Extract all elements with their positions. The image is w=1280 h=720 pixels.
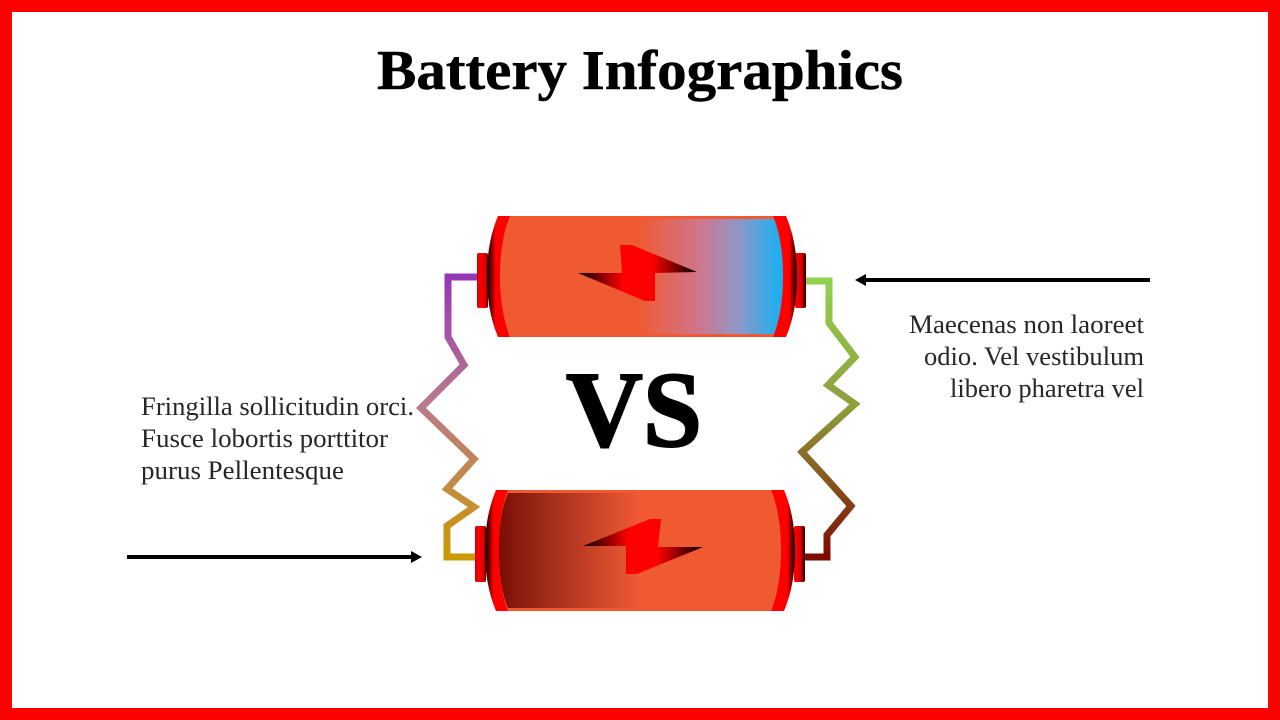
cap: top left [487,216,512,337]
text: left callout [141,392,414,485]
text: left callout: Fusce lobortis porttitor [141,424,388,453]
terminal: bottom right [794,526,805,582]
battery: bottom, draining [475,490,805,611]
text: right callout [909,310,1145,403]
terminal: bottom left [475,526,486,582]
cap: bottom right [770,490,795,611]
wire: left purple to gold [421,277,477,557]
title: Battery Infographics [377,40,903,102]
wire: right green to dark red [802,281,855,557]
terminal: top left [477,253,488,308]
text: right callout: Maecenas non laoreet [909,310,1145,339]
battery: top, charging [477,216,806,337]
terminal: top right [795,253,806,308]
lightning bolt: bottom [583,519,703,574]
text: right callout: libero pharetra vel [950,374,1144,403]
arrow: right callout [855,274,1150,286]
cap: top right [772,216,797,337]
battery body: bottom [499,490,781,611]
text: left callout: Fringilla sollicitudin orci. [141,392,414,421]
text: right callout: odio. Vel vestibulum [924,342,1144,371]
drain level: dark red to orange [499,493,672,608]
VS label: VS [566,351,702,470]
cap: bottom left [485,490,510,611]
lightning bolt: top [578,245,697,301]
arrow: left callout [127,551,422,563]
battery body: top [500,216,783,337]
text: left callout: purus Pellentesque [141,456,344,485]
charge level: orange to blue [607,219,783,334]
